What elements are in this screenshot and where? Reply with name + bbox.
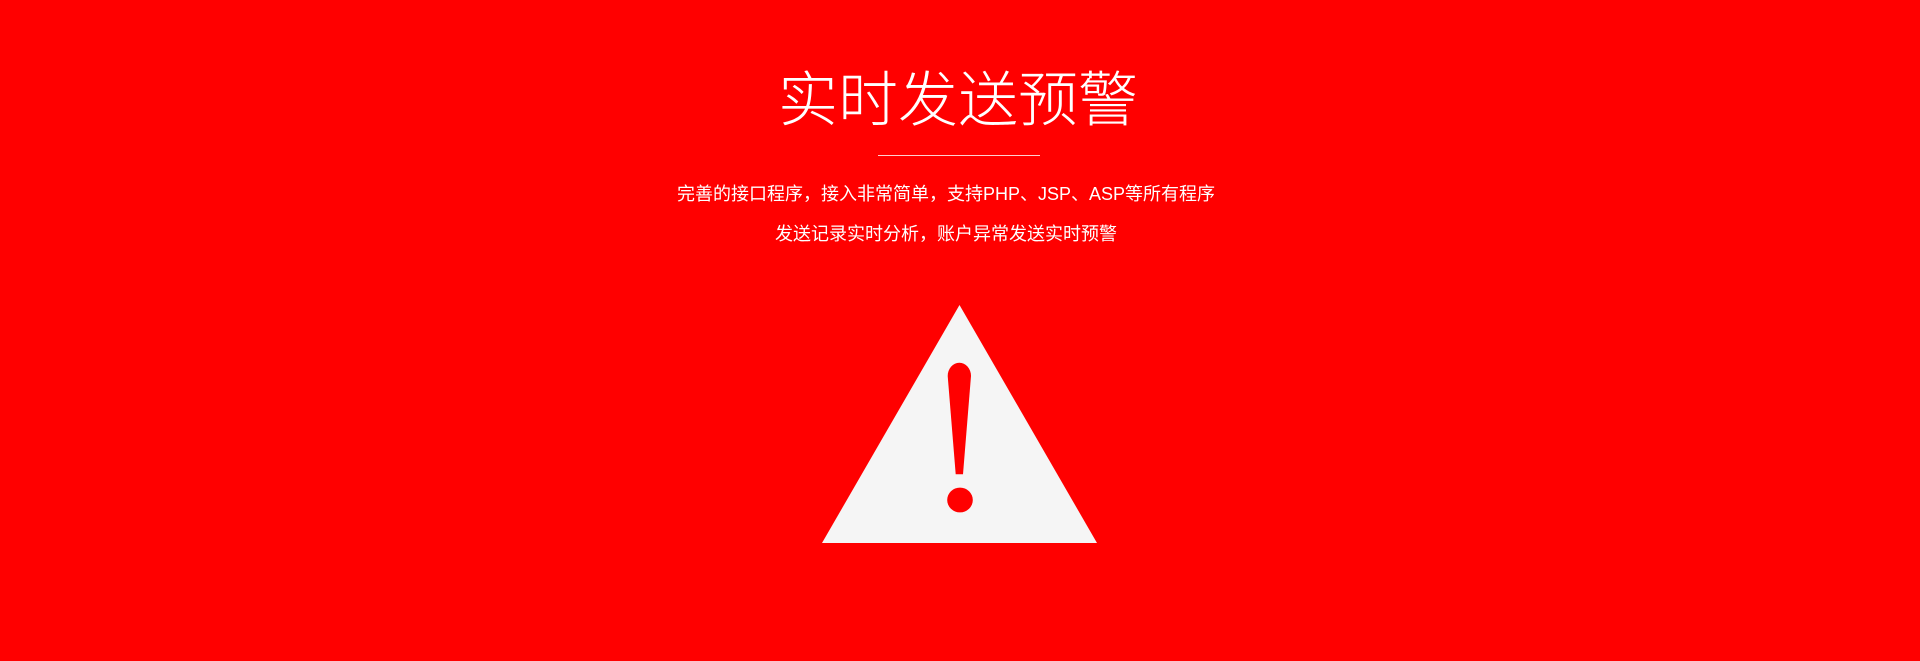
description line 1: 完善的接口程序，接入非常简单，支持PHP、JSP、ASP等所有程序 [677,184,1215,204]
title underline [878,155,1040,156]
title: 实时发送预警 [778,67,1138,134]
icon: warning triangle [822,305,1097,543]
description line 2: 发送记录实时分析，账户异常发送实时预警 [775,224,1117,244]
